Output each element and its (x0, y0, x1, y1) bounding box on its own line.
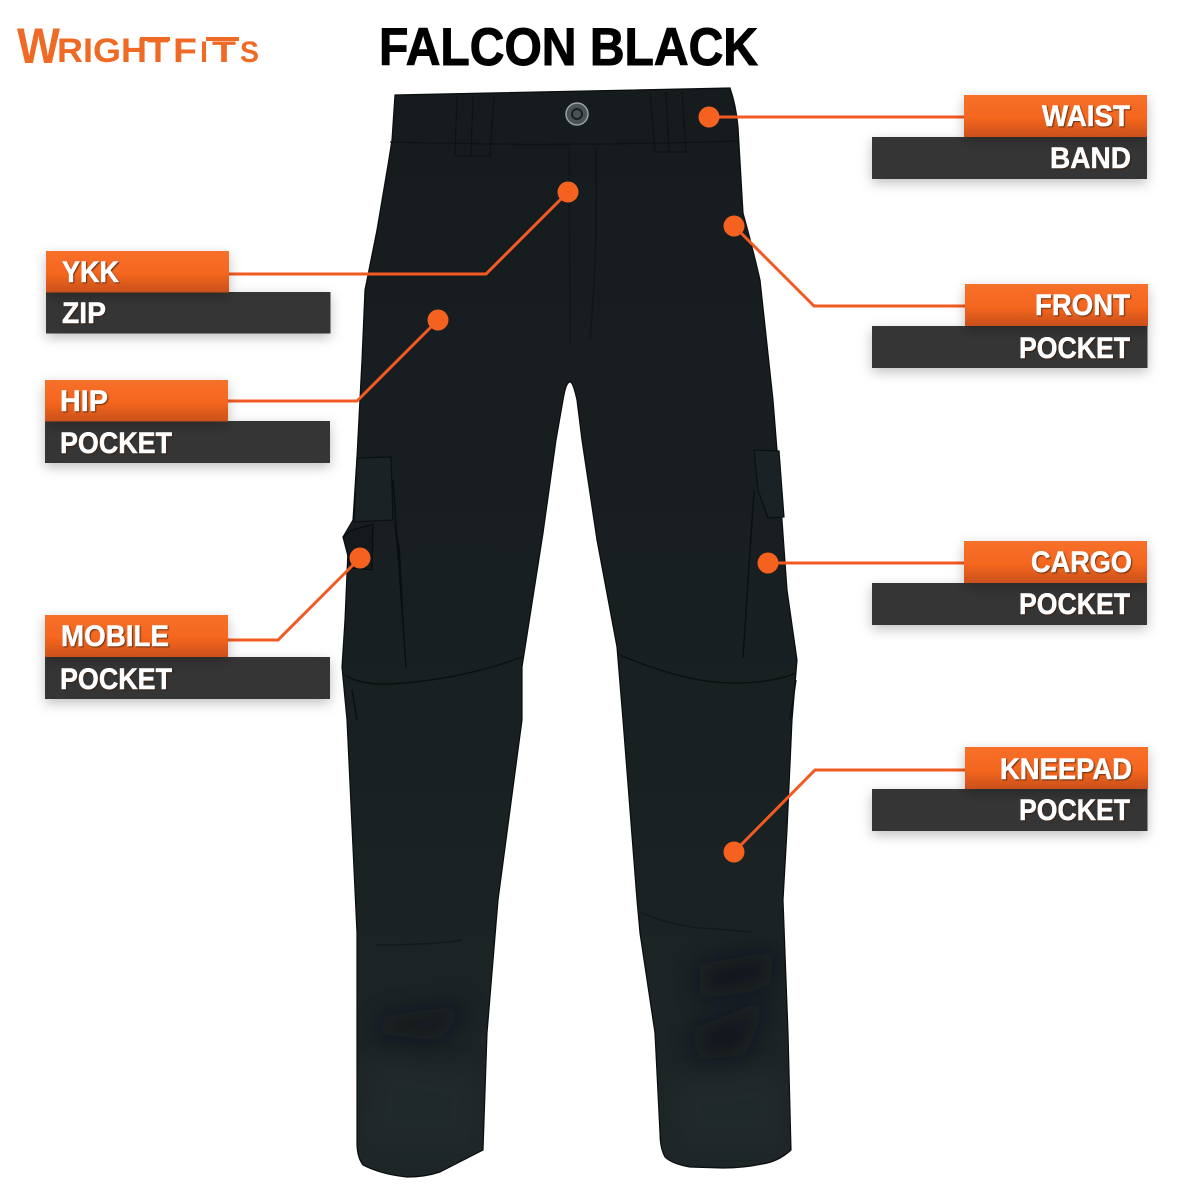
callout: waist band: BAND (1050, 142, 1131, 175)
callout: cargo pocket (758, 541, 1147, 625)
callout: mobile pocket: POCKET (60, 663, 172, 696)
lower knee seams (376, 912, 752, 945)
callout: hip pocket (45, 310, 448, 463)
callout: hip pocket: HIP (60, 385, 108, 418)
callout: cargo pocket: POCKET (1019, 588, 1130, 621)
callout: YKK zip: ZIP (62, 297, 106, 330)
callout: front pocket: POCKET (1019, 332, 1130, 365)
callout: kneepad pocket (724, 747, 1148, 862)
button (566, 103, 588, 125)
logo: WrightFits: I (200, 36, 208, 69)
callout: waist band: WAIST (1042, 100, 1130, 133)
callout: YKK zip (46, 182, 578, 334)
callout: mobile pocket (45, 548, 370, 699)
fly (569, 145, 596, 345)
waistband seam (390, 141, 738, 144)
callout: hip pocket: POCKET (60, 427, 172, 460)
right thigh cargo pocket (743, 450, 784, 658)
callout: waist band (698, 95, 1147, 179)
callout: cargo pocket: CARGO (1031, 546, 1132, 579)
logo: WrightFits: F (173, 32, 197, 70)
callout: kneepad pocket: POCKET (1019, 794, 1130, 827)
logo: WrightFits: W (17, 18, 61, 74)
left thigh cargo pocket (343, 457, 406, 668)
callout: YKK zip: YKK (62, 256, 119, 289)
callout: kneepad pocket: KNEEPAD (1000, 753, 1132, 786)
callout: mobile pocket: MOBILE (61, 620, 169, 653)
callout: front pocket (724, 216, 1148, 368)
knee seams (345, 657, 522, 684)
callout: front pocket: FRONT (1035, 289, 1130, 322)
trousers photo illustration (342, 88, 797, 1177)
logo: WrightFits: RIGHT (57, 32, 169, 70)
logo: WrightFits: S (240, 36, 259, 69)
belt loops (455, 92, 686, 156)
title: FALCON BLACK (379, 18, 758, 77)
logo: WrightFits (17, 18, 259, 74)
logo: WrightFits: T (212, 36, 236, 69)
